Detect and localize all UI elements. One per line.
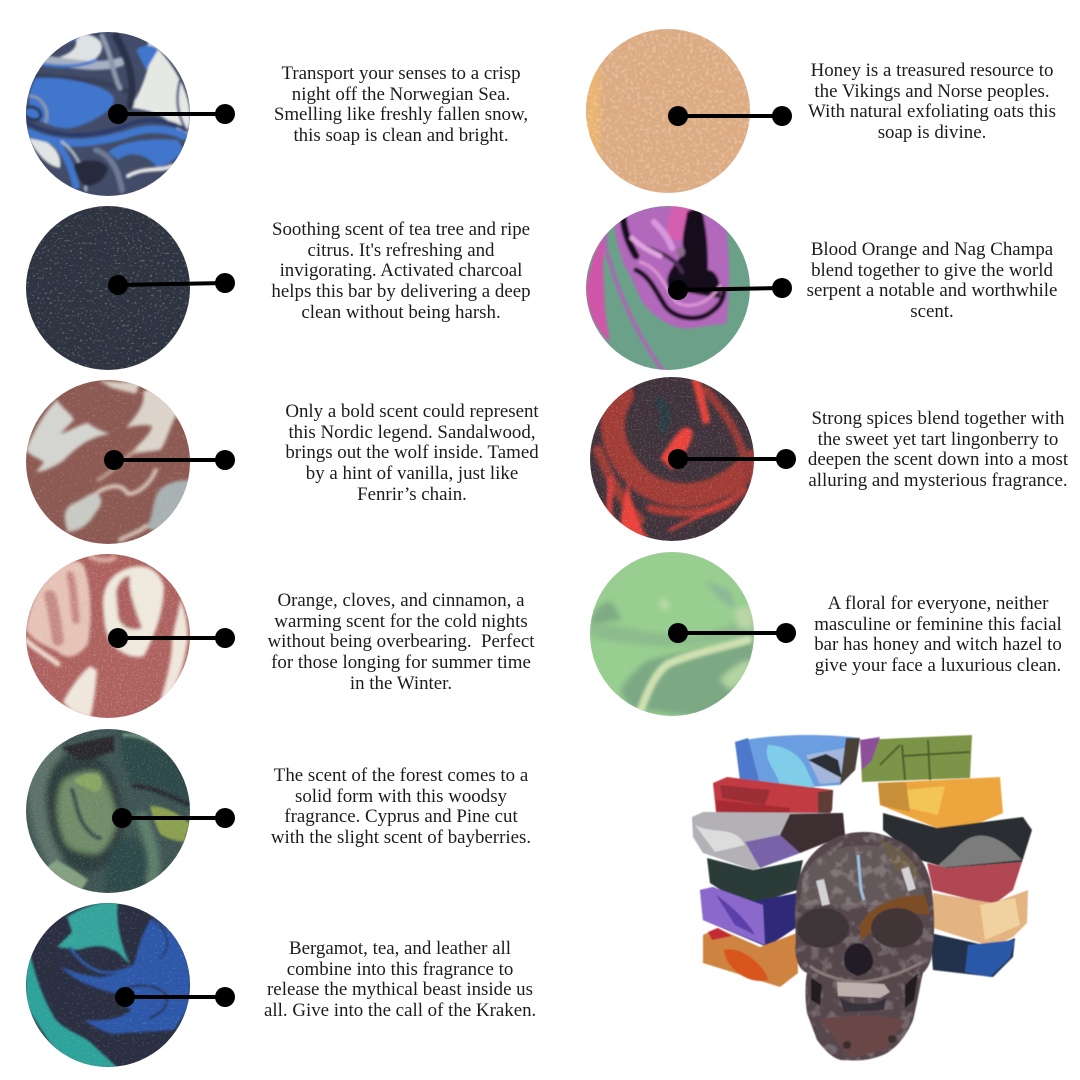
connector line <box>668 623 796 643</box>
soap swatch: teal, blue and black marble <box>26 903 190 1067</box>
description text: Soothing scent of tea tree and ripe <box>272 219 530 240</box>
description text: Smelling like freshly fallen snow, <box>274 104 528 125</box>
soap swatch: honey oat <box>586 29 750 193</box>
description text <box>270 765 531 848</box>
panel: Norwegian Sea soap <box>26 32 528 196</box>
soap bar: dark green <box>707 858 803 907</box>
description text <box>814 593 1062 676</box>
description text: serpent a notable and worthwhile <box>807 280 1057 301</box>
panel: world serpent soap <box>586 206 1057 370</box>
soap bar: white and purple <box>692 812 845 870</box>
panel: Fenrir soap <box>26 380 539 544</box>
description text: by a hint of vanilla, just like <box>306 463 518 484</box>
connector line <box>108 273 235 295</box>
connector line <box>108 628 235 648</box>
description text: all. Give into the call of the Kraken. <box>264 1000 536 1021</box>
description text: this soap is clean and bright. <box>293 125 509 146</box>
description text: the Vikings and Norse peoples. <box>814 80 1050 102</box>
description text: in the Winter. <box>350 673 452 694</box>
description text: scent. <box>910 301 954 322</box>
description text: Bergamot, tea, and leather all <box>289 938 511 959</box>
soap bar: red <box>713 777 833 832</box>
description text: Only a bold scent could represent <box>285 401 539 422</box>
description text: citrus. It's refreshing and <box>307 240 494 260</box>
description text: fragrance. Cyprus and Pine cut <box>284 806 518 827</box>
soap swatch: purple and green marble <box>586 206 750 370</box>
description text: warming scent for the cold nights <box>274 610 528 632</box>
panel: honey oat soap <box>586 29 1056 193</box>
description text: Blood Orange and Nag Champa <box>811 239 1053 260</box>
soap bar: purple <box>700 887 797 947</box>
soap swatch: red and cream marble <box>26 554 190 718</box>
description text: Orange, cloves, and cinnamon, a <box>277 590 525 611</box>
description text: blend together to give the world <box>811 260 1053 280</box>
panel: Orange clove cinnamon soap <box>26 554 534 718</box>
description text: Transport your senses to a crisp <box>281 63 521 84</box>
description text: brings out the wolf inside. Tamed <box>285 442 539 463</box>
soap swatch: dark green marble <box>26 729 190 893</box>
connector line <box>668 106 792 126</box>
soap bar: yellow <box>878 777 1003 828</box>
description text: the sweet yet tart lingonberry to <box>818 428 1058 450</box>
description text: this Nordic legend. Sandalwood, <box>288 422 536 442</box>
description text <box>267 590 534 694</box>
description text: night off the Norwegian Sea. <box>292 84 510 104</box>
description text: for those longing for summer time <box>271 652 531 673</box>
description text: with the slight scent of bayberries. <box>271 827 531 848</box>
soap bar: pink-red <box>927 862 1022 905</box>
description text: A floral for everyone, neither <box>828 593 1048 614</box>
photo: soap bars stacked around a skull <box>692 734 1033 1062</box>
connector line <box>108 104 235 124</box>
soap bar: navy <box>930 933 1015 977</box>
description text: masculine or feminine this facial <box>814 614 1062 634</box>
soap bar: black and silver <box>883 813 1032 868</box>
description text: combine into this fragrance to <box>287 958 513 980</box>
description text: without being overbearing. Perfect <box>267 631 534 652</box>
description text <box>285 401 539 505</box>
connector line <box>668 449 796 469</box>
soap swatch: speckled charcoal <box>26 206 190 370</box>
panel: forest soap <box>26 729 531 893</box>
description text: helps this bar by delivering a deep <box>271 281 531 302</box>
soap bar: blue <box>735 735 860 788</box>
panel: floral facial bar <box>590 552 1062 716</box>
soap swatch: blue and white marble <box>26 32 190 196</box>
description text: solid form with this woodsy <box>295 786 507 806</box>
description text: release the mythical beast inside us <box>267 979 533 1000</box>
panel: charcoal tea tree soap <box>26 206 531 370</box>
soap swatch: soft green marble <box>590 552 754 716</box>
description text: bar has honey and witch hazel to <box>814 634 1062 655</box>
description text <box>264 938 536 1021</box>
soap bar: green embossed <box>860 735 972 782</box>
description text: soap is divine. <box>878 122 986 143</box>
description text: The scent of the forest comes to a <box>274 765 528 786</box>
skull <box>790 830 940 1065</box>
connector line <box>104 450 235 470</box>
description text: give your face a luxurious clean. <box>815 655 1061 676</box>
description text: clean without being harsh. <box>301 302 501 323</box>
description text: Honey is a treasured resource to <box>811 60 1053 81</box>
description text: Fenrir’s chain. <box>357 484 467 505</box>
description text: With natural exfoliating oats this <box>808 101 1056 122</box>
description text <box>271 219 531 323</box>
connector line <box>668 278 792 300</box>
soap bar: orange and saffron <box>703 928 798 987</box>
soap swatch: brown and white marble <box>26 380 190 544</box>
soap swatch: black and red swirl <box>590 377 754 541</box>
description text <box>274 63 528 146</box>
description text <box>807 239 1057 322</box>
connector line <box>115 987 235 1007</box>
description text: Strong spices blend together with <box>812 408 1064 429</box>
description text <box>808 408 1068 491</box>
panel: Kraken soap <box>26 903 536 1067</box>
soap bar: tan honeycomb <box>930 890 1028 947</box>
description text: deepen the scent down into a most <box>808 449 1068 470</box>
connector line <box>112 808 235 828</box>
description text <box>808 60 1056 143</box>
panel: lingonberry soap <box>590 377 1068 541</box>
description text: invigorating. Activated charcoal <box>280 260 522 281</box>
description text: alluring and mysterious fragrance. <box>808 470 1068 491</box>
